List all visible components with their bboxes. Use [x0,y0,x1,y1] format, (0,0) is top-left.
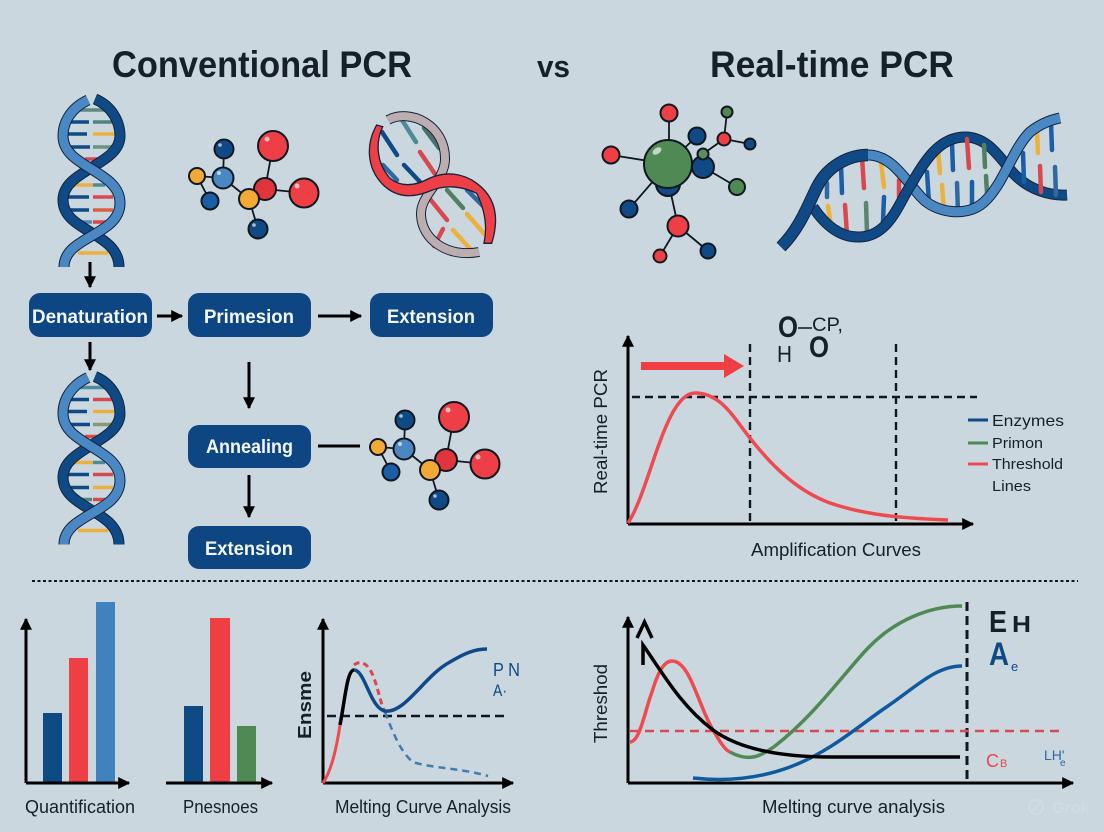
chart: melting curve analysis large: H [1012,611,1031,637]
arrow: Primesion to Extension [318,314,361,318]
icon: long DNA helix [781,118,1067,247]
chart: melting curve analysis small [295,619,520,817]
flow box: Denaturation [29,293,152,337]
chart: melting curve analysis large: B [1000,758,1007,770]
arrow: Denaturation to lower DNA [88,342,92,370]
legend: Lines [992,478,1031,495]
chart: melting curve analysis large: Melting curve analysis [762,797,945,817]
legend: Primon [992,435,1043,452]
title: vs: vs [537,49,570,84]
chart: melting curve analysis large: Threshod [591,664,611,743]
y label: Real-time PCR [591,369,611,494]
icon: red and grey DNA helix [369,116,496,253]
chart: melting curve analysis large [591,602,1073,817]
connector: Annealing to molecule [318,444,360,448]
arrow: red [641,354,744,378]
title: Real-time PCR: Real-time PCR [710,44,954,85]
flow box: Denaturation: Denaturation [32,307,148,328]
chart: quantification bars [25,602,135,817]
chart: melting curve analysis large: E [989,604,1007,639]
divider [32,580,1078,582]
curve: amplification [628,393,948,523]
chemical formula: H [777,341,792,367]
flow box: Extension [370,293,493,337]
x label: Amplification Curves [751,540,921,560]
chart: melting curve analysis large: C [986,751,999,771]
chart: melting curve analysis small: A· [493,681,507,700]
chart: melting curve analysis small: P N [493,660,520,680]
icon: molecule lower [370,402,500,510]
chart: melting curve analysis large: e [1060,758,1066,769]
axes [628,522,973,526]
arrow: DNA to Denaturation [88,262,92,287]
chart: Pnesnoes bars [166,618,272,817]
flow box: Annealing: Annealing [206,437,293,458]
title: Conventional PCR: Conventional PCR [112,44,412,85]
chemical formula [777,311,843,367]
arrow: Primesion to Annealing [248,362,250,408]
watermark: Grok [1029,800,1089,817]
chemical formula: CP, [812,315,843,336]
chart: melting curve analysis large: A [989,636,1009,672]
arrow: Annealing to Extension [248,475,250,517]
chart: Pnesnoes bars: Pnesnoes [183,797,258,817]
arrow: Denaturation to Primesion [157,314,182,318]
flow box: Annealing [188,425,311,468]
watermark: Grok: Grok [1052,800,1089,817]
chart: melting curve analysis small: Ensme [295,671,315,739]
legend: Threshold [992,456,1063,473]
chart: melting curve analysis large: LH' [1044,747,1065,763]
flow box: Extension lower: Extension [205,539,293,560]
threshold lines [632,344,977,524]
icon: DNA helix top left [63,99,120,267]
flow box: Extension: Extension [387,307,475,328]
icon: DNA helix lower left [63,376,120,544]
legend: Enzymes [992,413,1064,430]
chemical formula: O [809,331,829,364]
y axis [626,336,630,524]
chart: melting curve analysis small: Melting Curve Analysis [335,797,511,817]
chart: amplification curves [591,311,1064,560]
chemical formula: O [778,311,798,344]
flow box: Extension lower [188,526,311,569]
flow box: Primesion: Primesion [204,307,294,328]
legend [968,413,1064,495]
flow box: Primesion [188,293,311,337]
icon: large green molecule [602,104,756,262]
icon: molecule top [189,131,318,238]
chart: melting curve analysis large: e [1011,659,1018,674]
chart: quantification bars: Quantification [25,797,135,817]
